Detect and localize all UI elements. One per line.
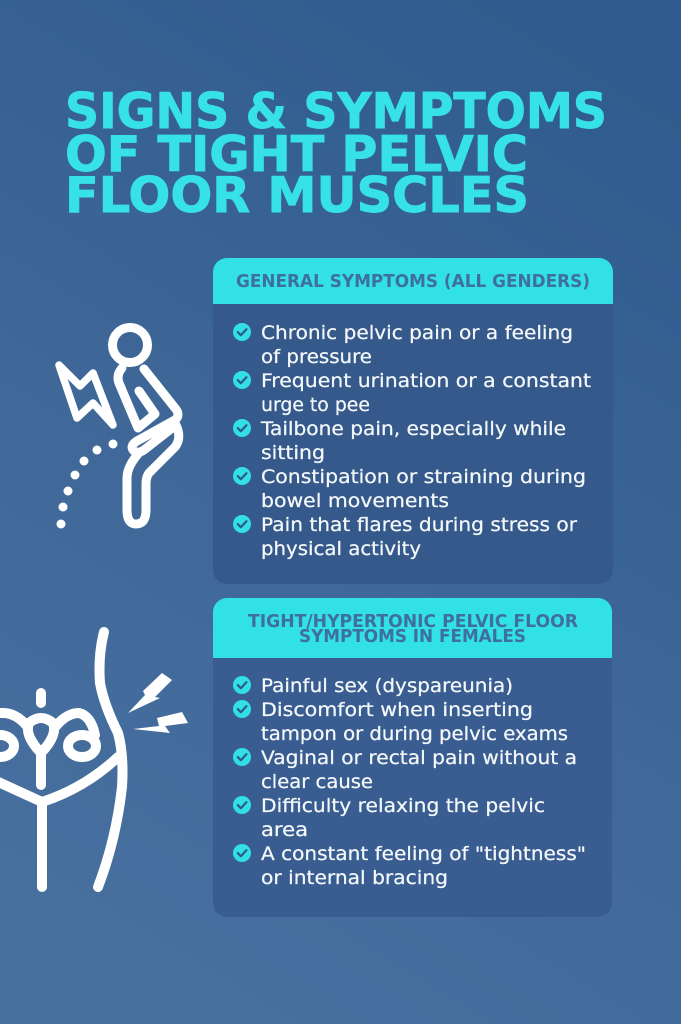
title: FLOOR MUSCLES xyxy=(65,167,529,224)
symptom list: general: Chronic pelvic pain or a feeling xyxy=(261,322,573,344)
symptom list: general: bowel movements xyxy=(261,490,449,512)
panel: female symptoms xyxy=(213,598,612,917)
panel header: general symptoms: GENERAL SYMPTOMS (ALL GENDERS) xyxy=(236,272,590,292)
title xyxy=(65,83,607,224)
symptom list: female: or internal bracing xyxy=(261,867,448,889)
symptom list: general: of pressure xyxy=(261,346,372,368)
panel header: female symptoms xyxy=(213,598,612,658)
symptom list: general: Tailbone pain, especially while xyxy=(260,418,566,440)
symptom list: female: Difficulty relaxing the pelvic xyxy=(261,795,545,817)
symptom list: female: Painful sex (dyspareunia) xyxy=(261,675,513,697)
title: OF TIGHT PELVIC xyxy=(65,126,528,183)
symptom list: general: sitting xyxy=(261,442,325,464)
symptom list: female: A constant feeling of "tightness" xyxy=(261,843,586,865)
title: SIGNS & SYMPTOMS xyxy=(65,83,607,140)
symptom list: general: Frequent urination or a constant xyxy=(261,370,591,392)
symptom list: general xyxy=(233,322,591,560)
icon: person with pelvic pain xyxy=(56,328,179,528)
symptom list: female: clear cause xyxy=(261,771,373,793)
panel header: female symptoms: SYMPTOMS IN FEMALES xyxy=(299,627,526,647)
symptom list: female: Vaginal or rectal pain without a xyxy=(261,747,577,769)
symptom list: general: physical activity xyxy=(261,538,421,560)
icon: female pelvis with pain bolts xyxy=(0,632,188,887)
symptom list: female: tampon or during pelvic exams xyxy=(261,723,568,745)
symptom list: general: Pain that flares during stress or xyxy=(261,514,577,536)
symptom list: female xyxy=(233,675,586,889)
symptom list: general: urge to pee xyxy=(261,394,370,416)
symptom list: female: area xyxy=(261,819,308,841)
panel: general symptoms xyxy=(213,258,613,584)
panel header: general symptoms xyxy=(213,258,613,304)
symptom list: female: Discomfort when inserting xyxy=(261,699,533,721)
panel header: female symptoms: TIGHT/HYPERTONIC PELVIC FLOOR xyxy=(248,612,579,632)
symptom list: general: Constipation or straining during xyxy=(261,466,586,488)
